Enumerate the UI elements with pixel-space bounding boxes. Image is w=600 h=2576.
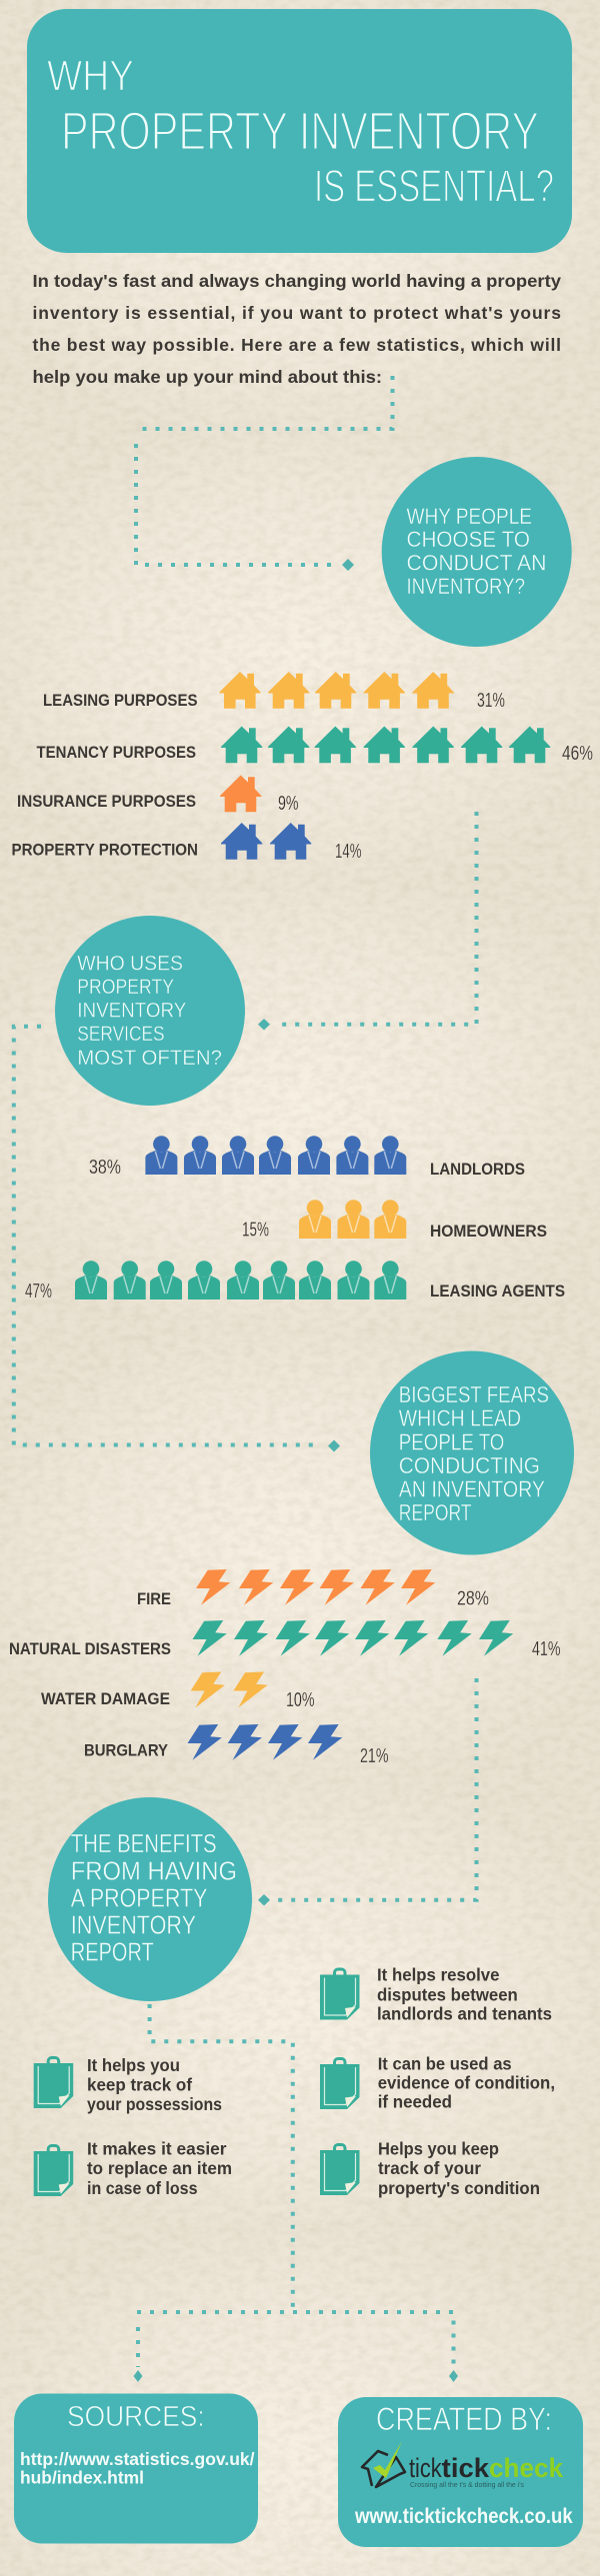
row: burglary: BURGLARY <box>84 1741 168 1759</box>
panel: sources: SOURCES: <box>67 2401 205 2433</box>
logo: ticktickcheck: tick <box>442 2453 490 2483</box>
benefit: replace an item: to replace an item <box>87 2158 232 2178</box>
panel: biggest fears circle <box>370 1351 574 1555</box>
panel: why people choose circle: INVENTORY? <box>406 574 525 599</box>
row: water damage <box>41 1671 315 1711</box>
row: leasing purposes: 31% <box>477 690 505 712</box>
panel: sources <box>14 2393 258 2543</box>
panel: created by: www.ticktickcheck.co.uk <box>354 2505 573 2528</box>
benefit: evidence of condition: if needed <box>378 2091 452 2111</box>
row: landlords: LANDLORDS <box>430 1161 525 1179</box>
panel: biggest fears circle: BIGGEST FEARS <box>399 1381 549 1407</box>
panel: who uses circle: WHO USES <box>77 952 183 976</box>
row: fire: FIRE <box>137 1590 171 1608</box>
row: natural disasters: NATURAL DISASTERS <box>9 1640 171 1658</box>
row: insurance purposes: 9% <box>278 793 299 815</box>
panel: benefits circle: A PROPERTY <box>71 1885 207 1913</box>
intro text: inventory is essential, if you want to protect what's yours <box>32 303 561 323</box>
benefit: replace an item: in case of loss <box>87 2178 198 2198</box>
arrow: to benefits circle <box>258 1678 476 1905</box>
row: tenancy purposes: TENANCY PURPOSES <box>36 744 196 762</box>
logo: ticktickcheck: tick <box>409 2453 442 2483</box>
panel: who uses circle: MOST OFTEN? <box>77 1046 222 1070</box>
row: leasing purposes: LEASING PURPOSES <box>43 692 198 710</box>
benefit: resolve disputes: It helps resolve <box>377 1965 500 1985</box>
panel: title banner <box>27 9 572 253</box>
row: leasing agents: 47% <box>25 1281 52 1302</box>
row: leasing purposes <box>43 672 505 712</box>
benefit: evidence of condition <box>320 2053 555 2111</box>
logo: ticktickcheck <box>362 2441 564 2489</box>
panel: biggest fears circle: REPORT <box>399 1499 472 1525</box>
row: homeowners <box>242 1200 547 1242</box>
row: water damage: WATER DAMAGE <box>41 1690 170 1708</box>
arrow: to who uses circle <box>258 812 476 1030</box>
panel: who uses circle: SERVICES <box>77 1022 165 1046</box>
panel: benefits circle: REPORT <box>71 1939 154 1967</box>
row: leasing agents <box>25 1261 565 1302</box>
intro text: help you make up your mind about this: <box>32 367 382 387</box>
logo: ticktickcheck: check <box>489 2453 564 2483</box>
row: natural disasters <box>9 1620 561 1660</box>
panel: biggest fears circle: CONDUCTING <box>399 1452 540 1478</box>
benefit: keep track of possessions: your possessions <box>87 2094 222 2114</box>
row: property protection: 14% <box>335 841 362 863</box>
panel: benefits circle: THE BENEFITS <box>71 1830 217 1858</box>
benefit: resolve disputes <box>320 1965 552 2023</box>
benefit: track property's condition <box>320 2139 540 2198</box>
benefit: evidence of condition: evidence of condition, <box>378 2073 555 2093</box>
row: insurance purposes <box>17 776 299 815</box>
panel: who uses circle <box>55 916 245 1106</box>
arrow: intro to first question <box>134 376 392 571</box>
panel: benefits circle: INVENTORY <box>71 1911 196 1939</box>
benefit: resolve disputes: landlords and tenants <box>377 2003 552 2023</box>
benefit: track property's condition: track of your <box>378 2158 481 2178</box>
intro text <box>32 271 561 387</box>
row: burglary: 21% <box>360 1745 389 1767</box>
benefit: evidence of condition: It can be used as <box>378 2053 512 2073</box>
benefit: track property's condition: property's condition <box>378 2178 540 2198</box>
panel: why people choose circle: CONDUCT AN <box>406 550 546 576</box>
row: homeowners: 15% <box>242 1220 269 1242</box>
panel: created by: CREATED BY: <box>376 2401 552 2437</box>
chart: biggest fears (bolts) <box>9 1569 561 1767</box>
panel: sources: hub/index.html <box>20 2467 144 2487</box>
row: fire: 28% <box>457 1587 489 1609</box>
panel: why people choose circle: CHOOSE TO <box>406 527 530 552</box>
row: homeowners: HOMEOWNERS <box>430 1223 547 1241</box>
chart: who uses services (people) <box>25 1136 565 1302</box>
row: fire <box>137 1569 489 1609</box>
panel: why people choose circle <box>382 457 572 647</box>
benefit: keep track of possessions: It helps you <box>87 2055 180 2075</box>
logo: ticktickcheck: Crossing all the t's & dotting all the i's <box>410 2480 524 2489</box>
panel: created by <box>338 2397 583 2547</box>
row: burglary <box>84 1724 389 1767</box>
row: leasing agents: LEASING AGENTS <box>430 1283 565 1300</box>
row: water damage: 10% <box>286 1689 315 1711</box>
row: insurance purposes: INSURANCE PURPOSES <box>17 793 196 811</box>
benefit: keep track of possessions <box>34 2055 222 2114</box>
intro text: In today's fast and always changing world having a property <box>32 271 561 291</box>
benefit: keep track of possessions: keep track of <box>87 2075 192 2095</box>
panel: biggest fears circle: PEOPLE TO <box>399 1429 504 1455</box>
panel: sources: http://www.statistics.gov.uk/ <box>20 2449 255 2469</box>
panel: biggest fears circle: WHICH LEAD <box>399 1405 521 1431</box>
panel: benefits circle <box>48 1797 252 2001</box>
panel: biggest fears circle: AN INVENTORY <box>399 1476 545 1502</box>
row: natural disasters: 41% <box>532 1638 561 1660</box>
title line: why: WHY <box>47 52 134 100</box>
row: landlords: 38% <box>89 1157 121 1179</box>
intro text: the best way possible. Here are a few statistics, which will <box>32 335 561 355</box>
panel: who uses circle: PROPERTY <box>77 975 174 999</box>
panel: why people choose circle: WHY PEOPLE <box>406 504 532 529</box>
row: property protection <box>12 823 362 863</box>
chart: reasons for inventory (houses) <box>12 672 593 863</box>
row: tenancy purposes <box>36 726 593 765</box>
arrow: benefits to sources and credits <box>134 2004 458 2382</box>
row: property protection: PROPERTY PROTECTION <box>12 842 198 860</box>
arrow: to biggest fears circle <box>14 1027 340 1451</box>
benefit: replace an item: It makes it easier <box>87 2139 227 2159</box>
benefit: track property's condition: Helps you keep <box>378 2139 499 2159</box>
panel: who uses circle: INVENTORY <box>77 998 186 1022</box>
panel: benefits circle: FROM HAVING <box>71 1857 237 1885</box>
benefit: replace an item <box>34 2139 232 2198</box>
row: landlords <box>89 1136 525 1179</box>
benefit: resolve disputes: disputes between <box>377 1985 518 2005</box>
